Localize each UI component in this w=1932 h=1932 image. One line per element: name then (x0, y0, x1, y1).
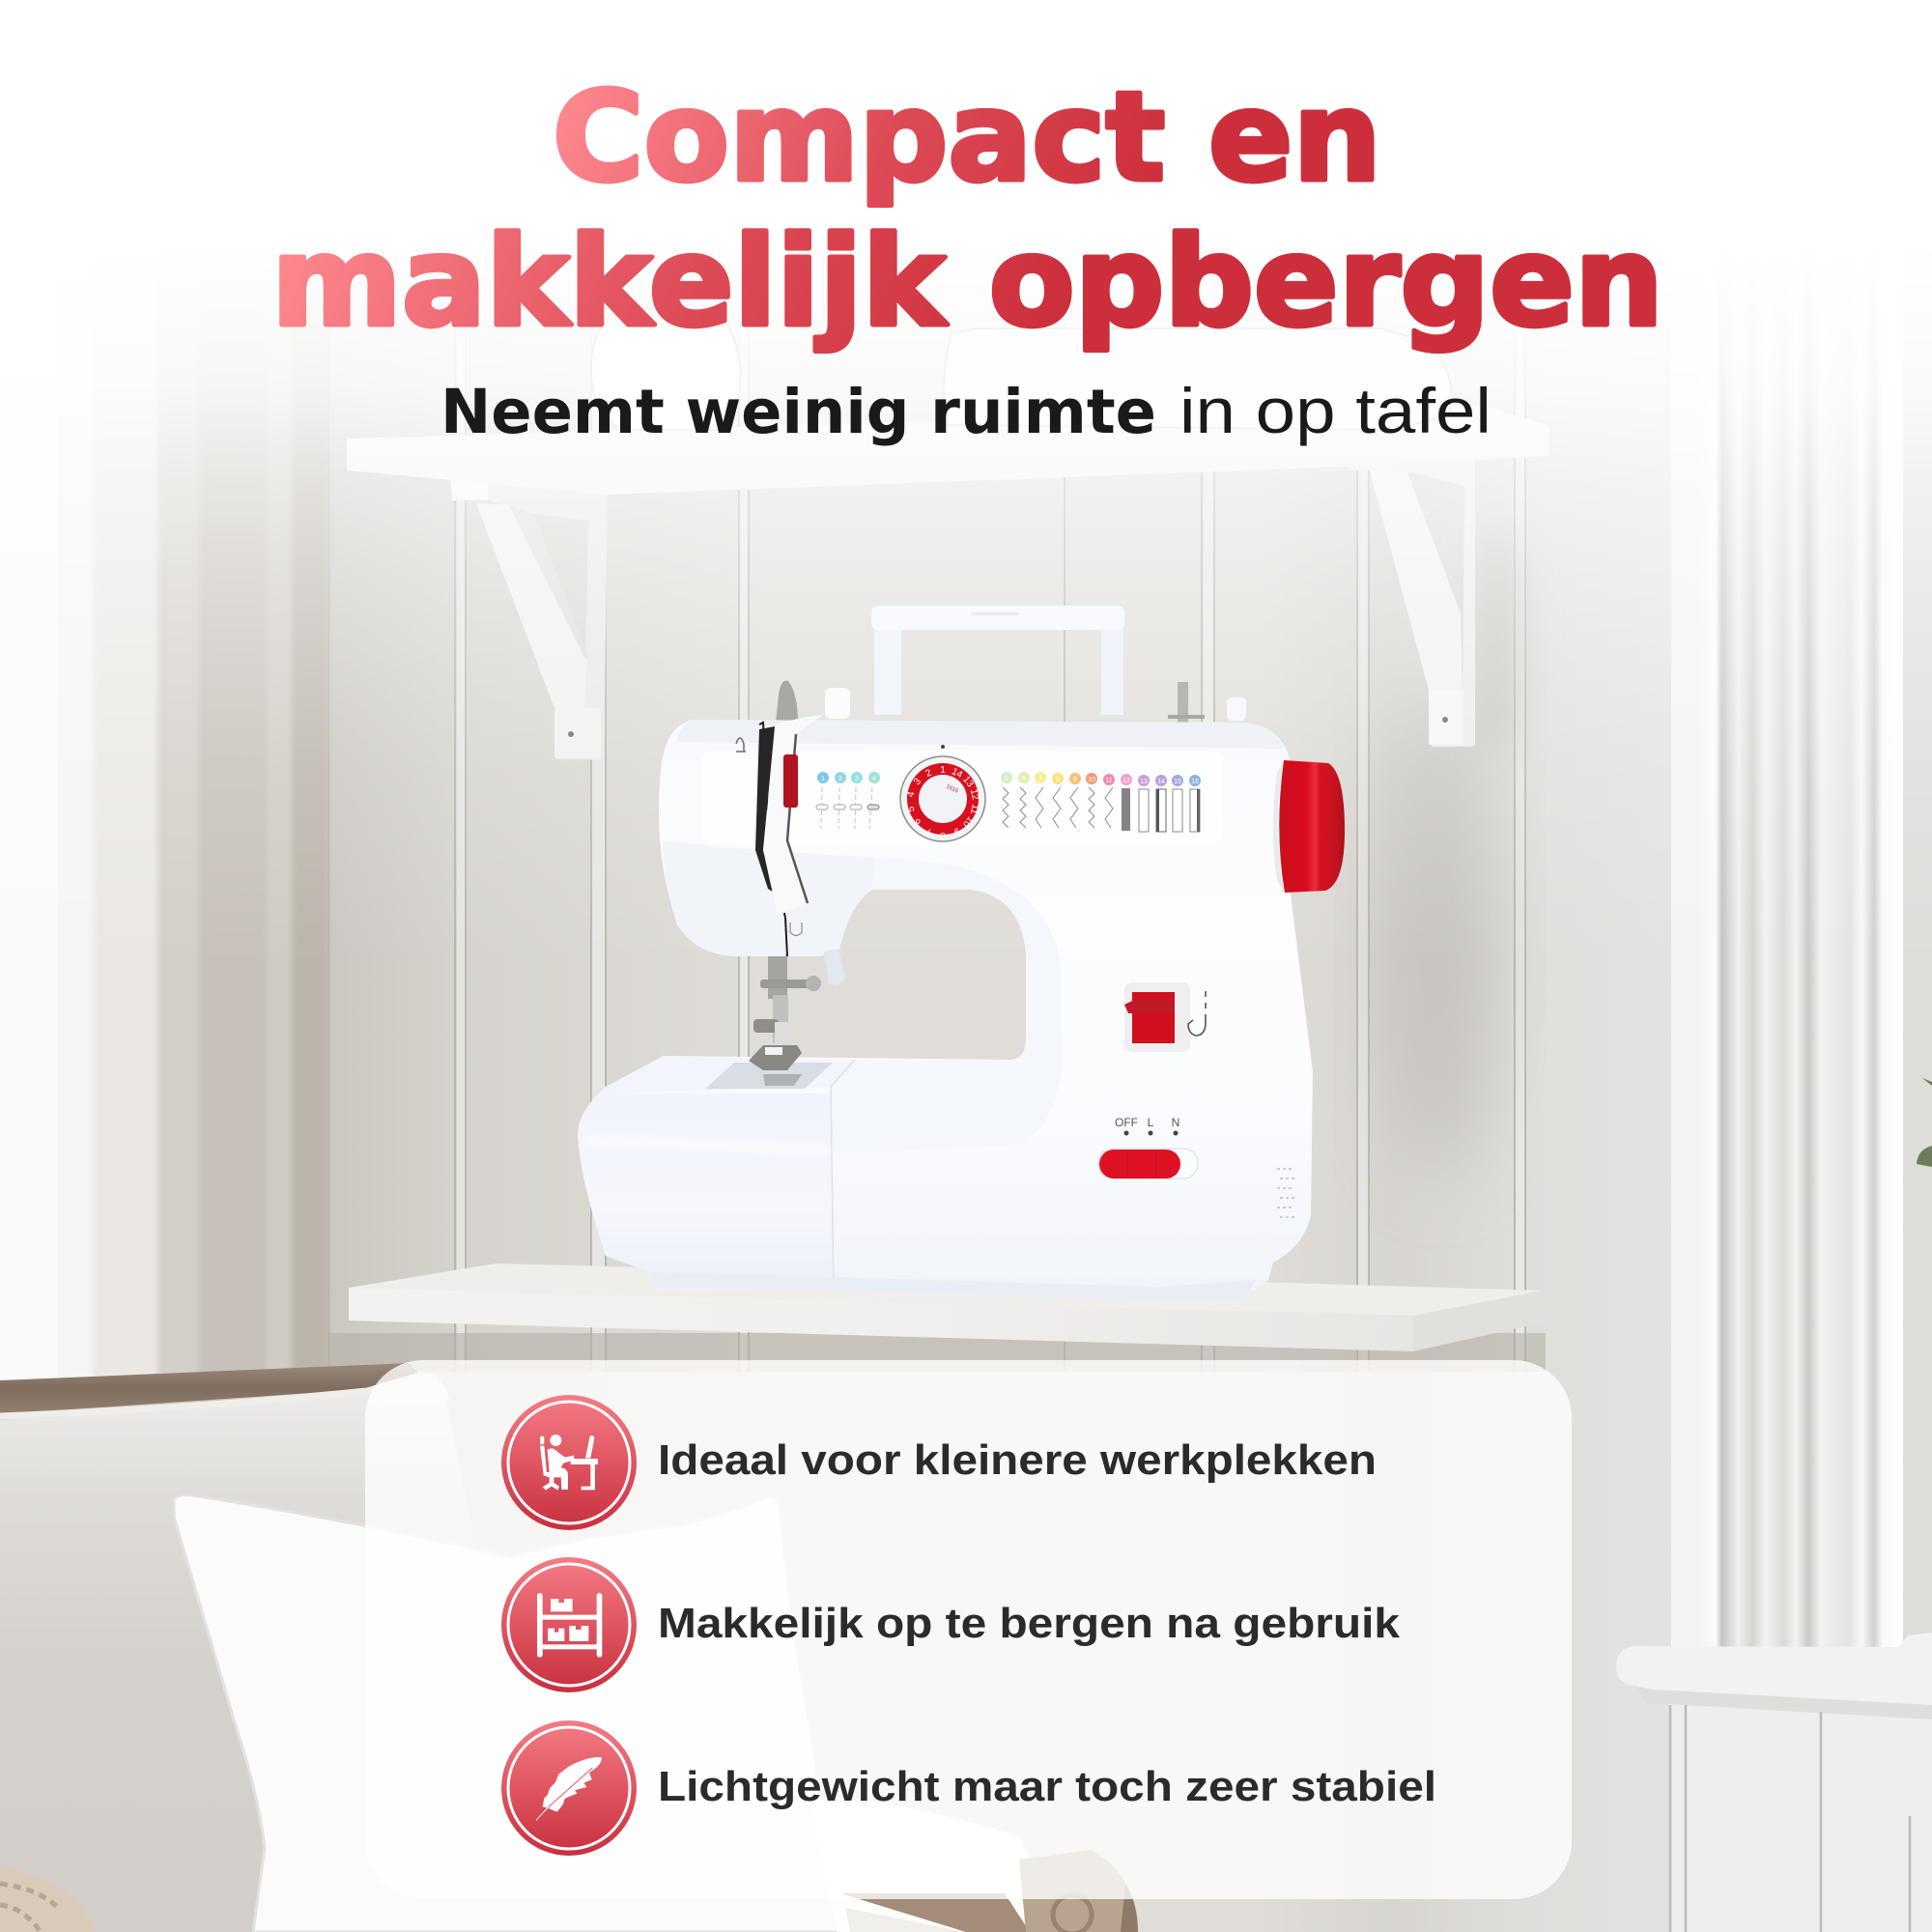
power switch: OFF (1115, 1116, 1138, 1129)
leaf at edge (1917, 1078, 1932, 1167)
pattern dial: 1 (940, 765, 946, 776)
feature text: Makkelijk op te bergen na gebruik (658, 1600, 1401, 1647)
stitch lever (1124, 982, 1190, 1052)
top shelf bracket right (1349, 440, 1522, 753)
left edge fade (0, 0, 58, 1391)
pillow (174, 1495, 840, 1932)
stitch circles (1001, 772, 1201, 786)
power switch: L (1148, 1116, 1154, 1129)
pattern dial: 12 (968, 788, 980, 802)
bed top (606, 1056, 855, 1094)
pattern dial: 9 (952, 825, 962, 838)
selector circles: 3 (855, 776, 859, 782)
stitch circles: 5 (1005, 776, 1009, 782)
thread path (755, 715, 823, 956)
subtitle (440, 375, 1492, 447)
free arm (578, 1087, 834, 1291)
stitch circles: 9 (1073, 777, 1077, 783)
bed seam (831, 1060, 855, 1291)
pattern dial: 8 (940, 830, 946, 840)
pattern dial: 2 (923, 767, 934, 780)
pattern dial (900, 745, 985, 841)
curtain (0, 0, 328, 1401)
machine body (578, 720, 1313, 1301)
pattern dial: 10 (960, 814, 976, 830)
stitch circles: 10 (1088, 777, 1095, 783)
under shelf shade (328, 1333, 1546, 1372)
stitch circles: 14 (1157, 779, 1165, 785)
pattern dial: 11 (968, 803, 980, 815)
stitch circles: 11 (1105, 778, 1113, 784)
base (650, 1272, 1256, 1301)
feature: makkelijk opbergen (501, 1557, 1401, 1692)
pattern dial: 14 (950, 766, 964, 781)
stitch circles: 16 (1191, 779, 1199, 785)
vents (1277, 1169, 1297, 1217)
top surface (676, 720, 1285, 749)
wainscot panel (1669, 1704, 1932, 1932)
needle assembly (749, 956, 821, 1086)
panel: features (365, 1360, 1572, 1899)
top knobs and pin (776, 681, 1246, 724)
pattern dial: 7 (923, 825, 933, 837)
hand wheel (1273, 760, 1345, 893)
stitch patterns (1003, 787, 1200, 832)
icon: storage rack (501, 1557, 637, 1692)
feature: lichtgewicht (501, 1720, 1436, 1856)
selector circles: 1 (821, 776, 825, 782)
feature: kleinere werkplekken (501, 1395, 1377, 1530)
power switch: N (1172, 1116, 1179, 1129)
presser lever (824, 949, 845, 985)
subtitle: in op tafel (1179, 375, 1492, 446)
subtitle: Neemt weinig ruimte (440, 377, 1156, 447)
sewing machine (578, 606, 1345, 1301)
pattern dial: 3 (912, 776, 923, 787)
stitch circles: 15 (1174, 779, 1181, 785)
feature text: Lichtgewicht maar toch zeer stabiel (658, 1763, 1436, 1810)
top shelf bracket left (450, 475, 608, 760)
tension dial (783, 754, 798, 808)
stitch circles: 12 (1122, 778, 1130, 784)
hook symbol (1188, 991, 1206, 1036)
stitch circles: 7 (1038, 776, 1042, 782)
pattern dial: 13 (960, 775, 976, 790)
stitch circles: 13 (1140, 779, 1148, 785)
bed highlight (584, 1140, 829, 1150)
title (271, 66, 1663, 355)
icon: feather (501, 1720, 637, 1856)
selector circles: 2 (838, 776, 842, 782)
stitch circles: 8 (1056, 777, 1060, 783)
fluted column (1671, 0, 1932, 1652)
stitch circles: 6 (1022, 776, 1026, 782)
icon: person at desk (501, 1395, 637, 1530)
thread guide (736, 738, 746, 752)
selector circles (816, 772, 880, 829)
armrest (810, 1796, 1138, 1932)
sofa (0, 1363, 676, 1932)
selector circles: 4 (872, 776, 876, 782)
arm bevel (831, 858, 1062, 1151)
feature text: Ideaal voor kleinere werkplekken (658, 1436, 1377, 1484)
title: Compact en (553, 66, 1381, 210)
title: makkelijk opbergen (271, 211, 1663, 355)
soft shadow on wall (1386, 676, 1492, 1179)
pattern dial: 6 (912, 816, 923, 827)
vase and towels on shelf (591, 309, 1451, 430)
knitted blanket (0, 1864, 97, 1932)
carrying handle (871, 606, 1124, 715)
lower shelf (349, 1264, 1543, 1351)
needle plate (705, 1063, 833, 1089)
pattern dial: 1616 (945, 784, 959, 795)
head lower shade (663, 840, 874, 956)
power switch (1098, 1116, 1198, 1179)
pattern dial: 4 (906, 790, 918, 798)
top shelf (347, 406, 1549, 495)
pattern dial: 5 (905, 805, 918, 813)
stitch panel (701, 751, 1223, 842)
white fade at top (0, 0, 1932, 966)
u hook (790, 923, 802, 935)
window sill (1616, 1633, 1932, 1719)
